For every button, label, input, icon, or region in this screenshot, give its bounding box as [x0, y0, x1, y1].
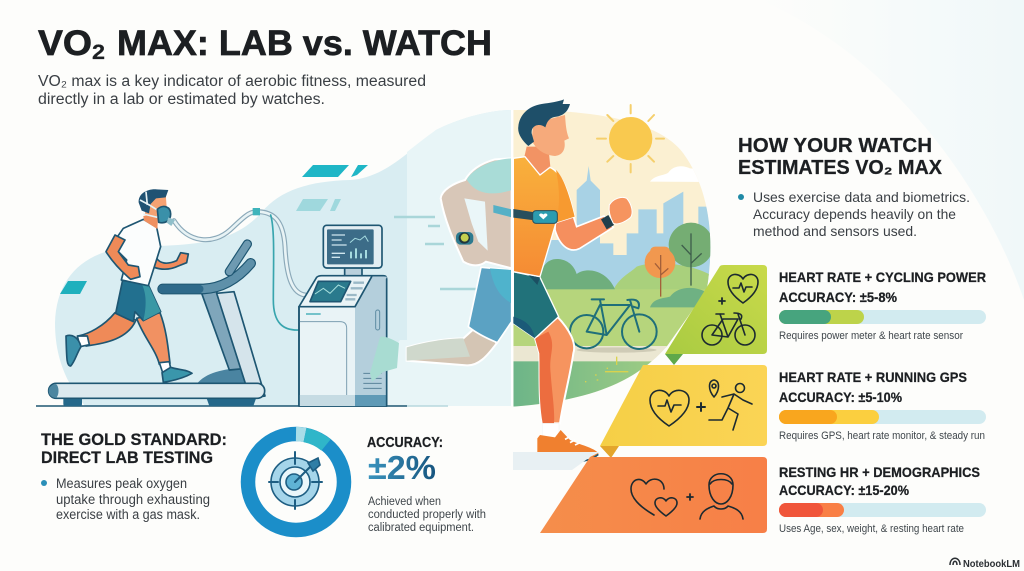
accuracy readout: ACCURACY: — [367, 435, 443, 451]
speed streaks — [60, 165, 478, 294]
head and hair — [518, 99, 570, 156]
city skyline — [540, 166, 712, 297]
accuracy readout: Achieved when — [368, 496, 441, 508]
hills and bushes — [540, 259, 709, 290]
ground line — [36, 405, 448, 407]
panel: resting HR tier: RESTING HR + DEMOGRAPHICS — [779, 464, 980, 480]
panel: gold standard heading — [41, 430, 227, 467]
center divider — [511, 110, 513, 406]
intro text: VO₂ max is a key indicator of aerobic fitness, measured — [38, 73, 426, 90]
shorts — [513, 272, 559, 338]
panel: resting HR tier — [540, 457, 986, 535]
lab side faded shoe — [370, 337, 399, 382]
accuracy bar — [779, 503, 986, 517]
runner on treadmill with gas mask — [66, 189, 192, 382]
lab bullet text: uptake through exhausting — [56, 492, 210, 507]
heading: how your watch estimates: ESTIMATES VO₂ MAX — [738, 157, 943, 179]
bicycle — [570, 299, 657, 349]
sports watch runner, lab half (faded) — [407, 158, 512, 365]
sports watch runner, field half — [513, 99, 632, 461]
icon: heart plus bike — [702, 274, 758, 345]
panel: running GPS tier: ACCURACY: ±5-10% — [779, 389, 902, 405]
icon: heart plus runner — [650, 380, 752, 430]
title: MAX: LAB vs. WATCH — [117, 24, 492, 63]
accuracy bar — [779, 410, 986, 424]
panel: gold standard heading: DIRECT LAB TESTING — [41, 448, 213, 467]
trees — [645, 223, 713, 297]
neck — [524, 147, 551, 177]
gas analyzer machine and tubes — [174, 208, 387, 406]
arm — [555, 190, 632, 250]
watch bullet text — [738, 189, 970, 239]
cloud — [650, 166, 699, 182]
panel: cycling power tier: Requires power meter & heart rate sensor — [779, 330, 963, 342]
breathing tube — [174, 208, 305, 330]
watch bullet text: Uses exercise data and biometrics. — [753, 189, 970, 205]
lab bullet text: Measures peak oxygen — [56, 476, 187, 491]
panel: gold standard heading: THE GOLD STANDARD: — [41, 430, 227, 449]
treadmill — [49, 244, 265, 406]
panel: cycling power tier: ACCURACY: ±5-8% — [779, 289, 897, 305]
donut chart — [248, 434, 344, 530]
accuracy readout: calibrated equipment. — [368, 522, 474, 534]
ground shadow below shoe — [513, 452, 600, 470]
lab bullet text — [41, 476, 210, 522]
torso — [513, 157, 575, 277]
panel: cycling power tier: HEART RATE + CYCLING POWER — [779, 269, 986, 285]
field scene background with sun, skyline and park — [513, 103, 720, 411]
accuracy readout: ±2% — [368, 449, 436, 486]
watch bullet text: method and sensors used. — [753, 223, 917, 239]
accuracy readout: conducted properly with — [368, 509, 486, 521]
heading: how your watch estimates: HOW YOUR WATCH — [738, 135, 932, 157]
accuracy readout — [367, 435, 486, 534]
panel: resting HR tier: Uses Age, sex, weight, & resting heart rate — [779, 523, 964, 535]
panel: running GPS tier: Requires GPS, heart rate monitor, & steady run — [779, 430, 985, 442]
monitor — [323, 225, 382, 277]
panel: running GPS tier — [600, 365, 986, 458]
sun — [597, 105, 664, 172]
lab bullet text: exercise with a gas mask. — [56, 507, 200, 522]
machine body — [299, 276, 387, 406]
leg and shoe — [535, 317, 599, 461]
panel: cycling power tier — [665, 265, 986, 365]
watch bullet text: Accuracy depends heavily on the — [753, 206, 956, 222]
small flowers — [585, 357, 628, 382]
intro text — [38, 73, 426, 108]
lab background blob — [55, 110, 512, 406]
icon: hearts plus person — [631, 474, 743, 519]
chest strap sensor — [513, 209, 557, 223]
panel: resting HR tier: ACCURACY: ±15-20% — [779, 482, 909, 498]
intro text: directly in a lab or estimated by watches. — [38, 91, 325, 108]
accuracy bar — [779, 310, 986, 324]
lab side wristwatch — [456, 232, 473, 245]
icon: target with arrow — [269, 452, 322, 509]
title: 2 — [92, 41, 105, 64]
heading: how your watch estimates — [738, 135, 943, 179]
title: VO — [38, 24, 92, 63]
panel: running GPS tier: HEART RATE + RUNNING GPS — [779, 369, 967, 385]
